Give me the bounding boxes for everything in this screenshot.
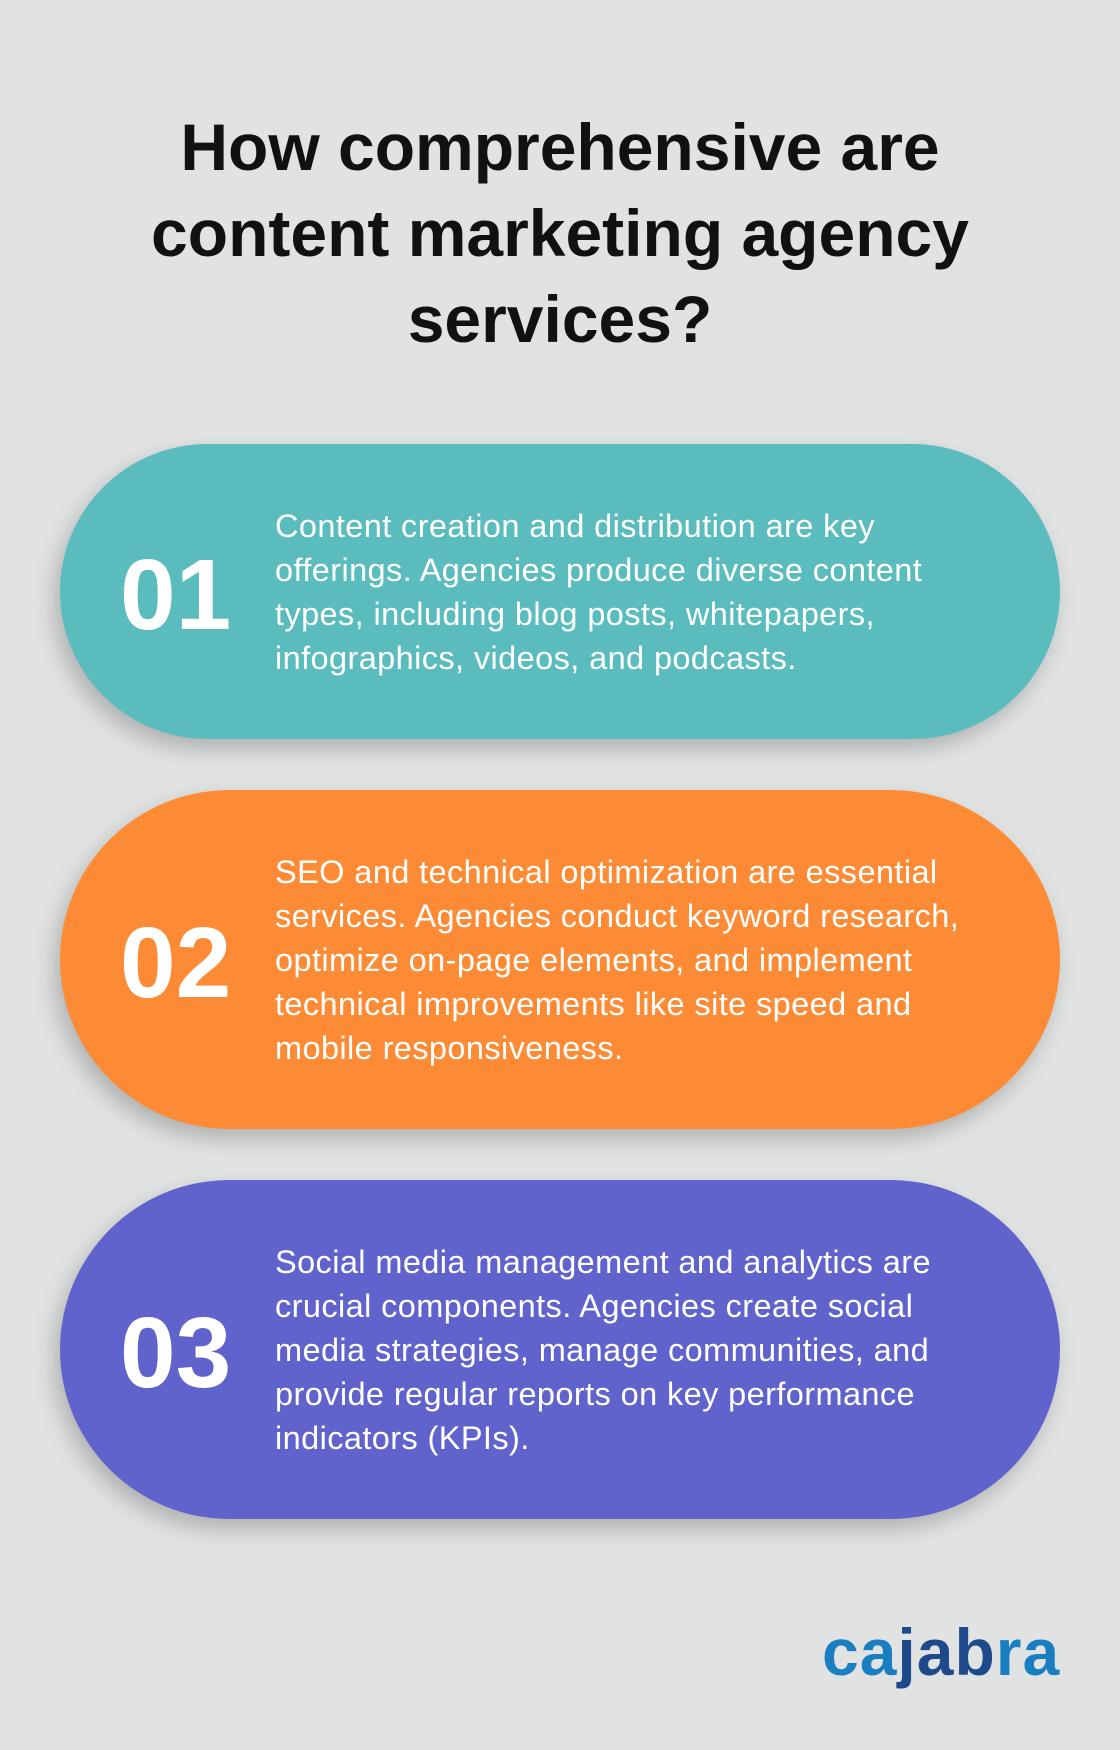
title: How comprehensive are [180,110,940,184]
text 03: media strategies, manage communities, and [275,1332,929,1368]
text 03: Social media management and analytics are [275,1244,931,1280]
text 02 [275,854,959,1066]
text 02: technical improvements like site speed and [275,986,911,1022]
text 01 [275,508,922,676]
text 03 [275,1244,931,1456]
text 01: offerings. Agencies produce diverse content [275,552,922,588]
title: content marketing agency [151,196,969,270]
text 03: provide regular reports on key performance [275,1376,915,1412]
number 01: 01 [120,538,231,650]
text 02: optimize on-page elements, and implement [275,942,912,978]
text 03: crucial components. Agencies create social [275,1288,913,1324]
text 01: types, including blog posts, whitepapers, [275,596,875,632]
panel: 03 [60,1180,1060,1519]
number 03: 03 [120,1296,231,1408]
panel: 01 [60,444,1060,739]
panel: 02 [60,790,1060,1129]
logo: cajabra [822,1615,1060,1689]
text 03: indicators (KPIs). [275,1420,530,1456]
text 01: Content creation and distribution are key [275,508,875,544]
title: services? [408,282,712,356]
text 02: mobile responsiveness. [275,1030,623,1066]
text 02: SEO and technical optimization are essential [275,854,938,890]
title [151,110,969,356]
text 02: services. Agencies conduct keyword research, [275,898,959,934]
number 02: 02 [120,906,231,1018]
text 01: infographics, videos, and podcasts. [275,640,797,676]
